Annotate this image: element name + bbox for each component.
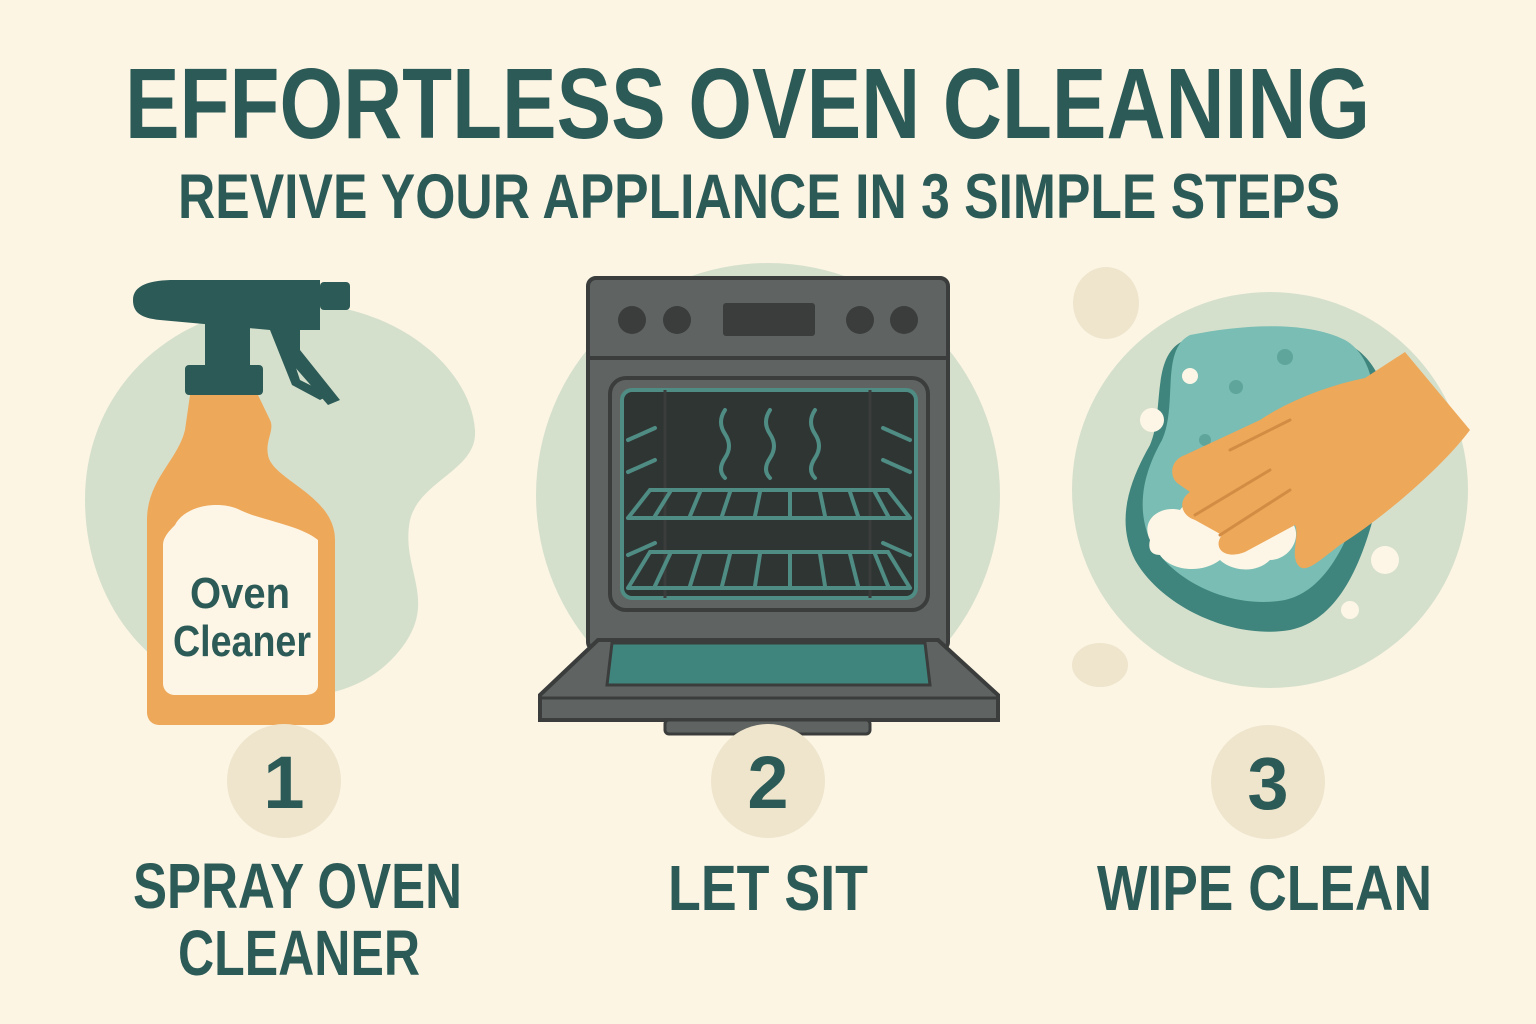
- panel: step 3 wipe: [1072, 267, 1470, 924]
- number badge 3: [1211, 725, 1325, 839]
- step label 1: SPRAY OVEN: [133, 850, 462, 922]
- number badge 2: 2: [747, 741, 789, 824]
- step label 2: LET SIT: [668, 852, 868, 924]
- icon: spray bottle: Oven: [190, 569, 290, 618]
- number badge 1: 1: [263, 741, 305, 824]
- panel: step 2 let sit: [536, 263, 1000, 924]
- number badge 1: [227, 724, 341, 838]
- icon: spray bottle: Cleaner: [173, 617, 311, 666]
- panel: step 1 spray: [85, 280, 475, 989]
- icon: spray bottle: [133, 280, 350, 725]
- background circle 2: [536, 263, 1000, 727]
- step label 1: CLEANER: [178, 917, 420, 989]
- step label 3: WIPE CLEAN: [1097, 852, 1432, 924]
- icon: sponge and hand: [1126, 326, 1470, 632]
- number badge 2: [711, 724, 825, 838]
- icon: oven: [540, 278, 998, 734]
- step label 1: [133, 850, 462, 989]
- background circle 3: [1072, 292, 1468, 688]
- number badge 3: 3: [1247, 742, 1289, 825]
- bottle label: [163, 505, 318, 695]
- background blob 1: [85, 304, 475, 697]
